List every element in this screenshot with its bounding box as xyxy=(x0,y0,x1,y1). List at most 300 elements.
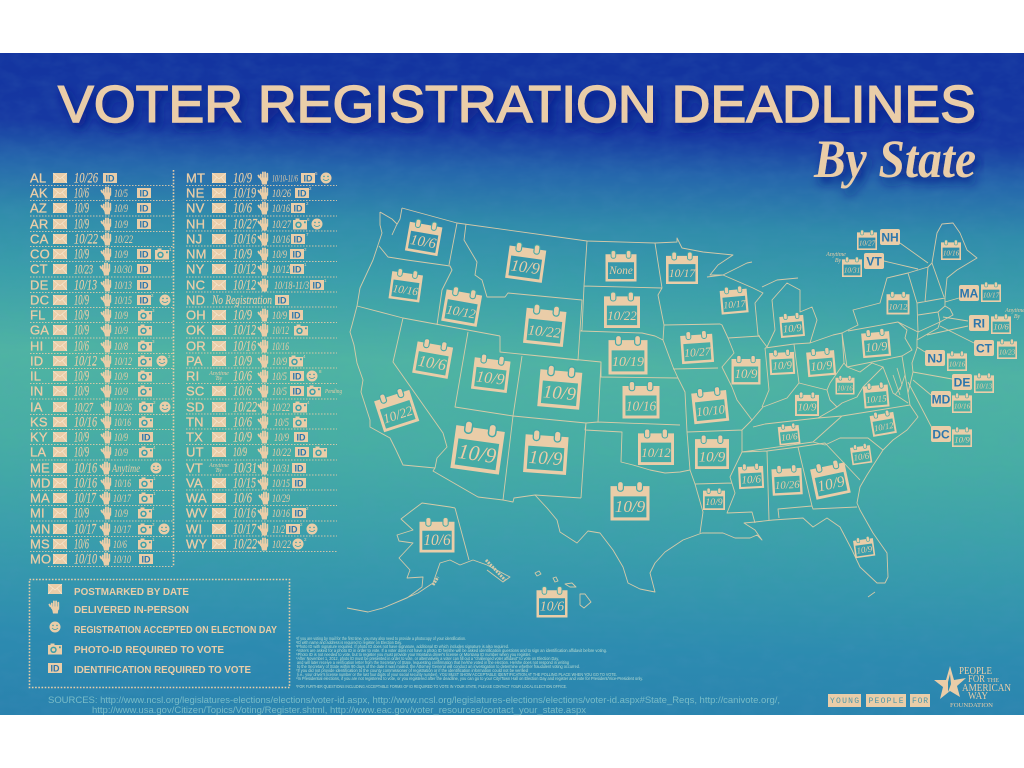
calendar: NC: 10/12 xyxy=(873,420,895,433)
row: WI: 11/2 xyxy=(272,522,285,536)
logo: Young People For xyxy=(828,694,930,707)
row: AZ: ID xyxy=(140,204,149,214)
row: SC xyxy=(186,384,342,400)
row: CA xyxy=(30,232,133,248)
row: WV: 10/16 xyxy=(233,506,256,522)
row: RI xyxy=(186,368,322,384)
legend: delivered xyxy=(49,601,189,616)
row: TN: 10/6 xyxy=(233,414,252,430)
row: AL: ID xyxy=(106,174,115,184)
row: LA: 10/9 xyxy=(114,445,128,459)
row: NV: ID xyxy=(294,204,303,214)
row: NE: NE xyxy=(186,186,205,200)
row: IL xyxy=(30,368,152,384)
row: OK: OK xyxy=(186,322,205,338)
row: AK: AK xyxy=(30,186,48,200)
calendar: ID: 10/12 xyxy=(445,302,477,322)
row: MA: 10/17 xyxy=(74,490,97,506)
callout: DE: 10/13 xyxy=(976,383,993,391)
row: WV xyxy=(186,506,309,522)
row: NC xyxy=(186,278,327,294)
calendar: SD: 10/22 xyxy=(607,308,637,323)
row: VT: ID xyxy=(294,464,304,474)
row: WA: 10/6 xyxy=(233,490,252,506)
row: AK: 10/6 xyxy=(74,186,89,202)
row: AL: AL xyxy=(30,170,46,186)
row: ND: ND xyxy=(186,292,205,308)
row: IA: 2 xyxy=(153,400,156,405)
row: ME xyxy=(30,460,162,476)
calendar: FL: 10/9 xyxy=(856,543,873,556)
row: NC: ID xyxy=(312,280,322,290)
row: MD: MD xyxy=(30,476,51,490)
row: RI: 10/5 xyxy=(272,369,287,383)
row: SC: Pending xyxy=(324,389,342,395)
row: ME: Anytime xyxy=(111,461,140,475)
calendar: NY: 10/12 xyxy=(889,302,907,311)
row: TN: TN xyxy=(186,414,204,430)
row: NV: 2 xyxy=(306,201,309,206)
row: ND xyxy=(186,292,289,308)
row: NM: 10/9 xyxy=(272,247,287,261)
row: OH: OH xyxy=(186,308,206,322)
row: MA: 10/17 xyxy=(113,491,132,505)
calendar: IN: 10/9 xyxy=(772,359,793,372)
calendar: OR: 10/16 xyxy=(392,283,419,298)
row: DE: ID xyxy=(140,280,149,290)
footnotes: to the Secretary of State within 90 days of the date it was mailed, the Attorney General will conduct an investigation to determine whether fraudulent voting occurred. xyxy=(297,664,580,669)
row: MD: 10/16 xyxy=(114,476,131,490)
calendar: WY xyxy=(523,303,567,347)
row: CO: 10/9 xyxy=(114,247,128,261)
calendar: OH xyxy=(806,347,836,377)
row: NM: 2 xyxy=(304,247,307,252)
calendar: LA: 10/9 xyxy=(705,497,723,508)
row: SD: 10/22 xyxy=(233,400,257,416)
row: ND: ID xyxy=(278,296,287,306)
callout: RI xyxy=(969,308,1024,334)
row: NV: NV xyxy=(186,200,205,216)
calendar: IA xyxy=(680,330,714,364)
logo: People For the American Way Foundation xyxy=(934,666,1011,709)
row: CO xyxy=(30,246,172,262)
calendar: CO xyxy=(537,364,583,410)
row: VA: ID xyxy=(294,478,304,488)
row: AK: 10/5 xyxy=(114,186,128,200)
row: AK: ID xyxy=(140,188,149,198)
sources: http://www.usa.gov/Citizen/Topics/Voting/Register.shtml, http://www.eac.gov/voter_resources/contact_your_state.aspx xyxy=(92,705,586,716)
row: KY: 10/9 xyxy=(74,430,89,446)
row: DC: 10/9 xyxy=(74,292,89,308)
calendar: HI: 10/6 xyxy=(540,599,564,614)
callout: NH: NH xyxy=(881,230,899,244)
row: MI: 10/9 xyxy=(114,506,128,520)
row: AZ: 10/9 xyxy=(74,200,89,216)
calendar: OK: 10/12 xyxy=(641,445,671,460)
row: OK: 10/12 xyxy=(233,322,256,338)
row: FL: 10/9 xyxy=(74,308,89,324)
row: NV: 10/6 xyxy=(233,200,252,216)
row: NY: 1 xyxy=(304,262,307,267)
footnotes: ⁸In Presidential elections, if you are not registered to vote, or you registered after the deadline, you can go to your City/Town Hall on Election Day and register and vote for President/Vice-President only. xyxy=(296,676,643,681)
row: MN xyxy=(30,522,170,538)
row: RI: 8 xyxy=(319,369,322,374)
calendar: FL xyxy=(853,536,875,558)
row: AR: 10/9 xyxy=(74,216,89,232)
row: WY: 10/22 xyxy=(233,536,257,552)
row: ME: 10/16 xyxy=(74,460,97,476)
calendar: ME xyxy=(941,240,961,260)
row: HI: 10/6 xyxy=(74,338,89,354)
row: CO: CO xyxy=(30,246,50,262)
callout: NH: 10/27 xyxy=(859,240,876,248)
callout: DE xyxy=(952,373,994,393)
footnotes: ⁶After November 1, 2012, photo ID must be presented in order to vote, or alternatively a voter can fill out a "challenged voter affidavit" to vote on Election Day, xyxy=(296,656,559,661)
row: CA: CA xyxy=(30,232,49,246)
row: SD: 4 xyxy=(307,400,310,405)
row: KS: 10/16 xyxy=(74,414,97,430)
row: AR xyxy=(30,216,151,232)
row: WA: 10/29 xyxy=(272,491,290,505)
callout: MA: 10/17 xyxy=(983,292,1000,300)
row: AK xyxy=(30,186,151,202)
row: MO xyxy=(30,552,153,568)
legend: election day xyxy=(50,622,277,636)
calendar: NE xyxy=(608,336,648,374)
calendar: AR xyxy=(695,435,729,469)
row: MS: 10/6 xyxy=(113,537,127,551)
row: MD: 10/16 xyxy=(74,476,97,492)
row: NE: 10/26 xyxy=(272,186,291,200)
footnotes: ³Photo ID with signature required. If photo ID does not have signature, additional ID which includes signature is also required. xyxy=(296,644,509,649)
row: UT: 10/22 xyxy=(272,445,291,459)
row: AR: 10/9 xyxy=(114,217,128,231)
row: IA: 10/26 xyxy=(114,400,132,414)
row: AZ xyxy=(30,200,151,216)
row: PA xyxy=(186,354,306,370)
calendar: WI: 10/17 xyxy=(723,298,747,311)
calendar: SC xyxy=(850,443,872,465)
calendar: GA: 10/9 xyxy=(816,473,847,495)
calendar: LA xyxy=(703,488,725,510)
row: KS xyxy=(30,414,153,430)
calendar: AR: 10/9 xyxy=(699,450,726,466)
callout: DC xyxy=(931,426,972,447)
row: MA xyxy=(30,490,156,506)
row: ND: No Registration xyxy=(211,292,272,307)
calendar: NY xyxy=(886,292,910,314)
row: WI xyxy=(186,522,318,538)
row: NV: 10/16 xyxy=(272,201,290,215)
row: MN: 10/17 xyxy=(113,522,132,536)
calendar: UT xyxy=(471,353,511,393)
row: RI: RI xyxy=(186,368,199,384)
row: OR xyxy=(186,338,289,354)
row: WI: 2 xyxy=(300,522,303,527)
callout: MA xyxy=(959,282,1001,302)
row: OH: 10/9 xyxy=(272,308,287,322)
row: PA: PA xyxy=(186,354,203,368)
calendar: IN xyxy=(769,349,795,375)
row: MN: 10/17 xyxy=(74,522,97,538)
calendar: GA xyxy=(809,458,851,500)
row: RI: 10/6 xyxy=(233,368,252,384)
calendar: NV xyxy=(412,337,454,379)
calendar: NM: 10/9 xyxy=(528,447,564,470)
calendar: AZ xyxy=(450,419,506,475)
row: MT: 10/9 xyxy=(233,170,252,186)
logo: Young People For: YOUNG xyxy=(830,697,859,706)
logo: Young People For: PEOPLE xyxy=(868,697,904,706)
row: SD: SD xyxy=(186,400,204,414)
row: NM: NM xyxy=(186,246,207,262)
row: ID: ID xyxy=(30,354,43,368)
row: IN: 10/9 xyxy=(114,384,128,398)
callout: NJ xyxy=(925,350,967,371)
calendar: AL: 10/26 xyxy=(775,479,800,492)
calendar: IL: 10/9 xyxy=(735,367,758,381)
row: MT: ID xyxy=(304,174,313,184)
row: CT: CT xyxy=(30,262,48,276)
row: CA: 10/22 xyxy=(114,232,133,246)
row: GA: 10/9 xyxy=(74,322,89,338)
calendar: TX xyxy=(610,482,650,520)
calendar: VA xyxy=(862,381,890,409)
footnotes: *FOR FURTHER QUESTIONS INCLUDING ACCEPTABLE FORMS OF ID REQUIRED TO VOTE IN YOUR STATE, PLEASE CONTACT YOUR LOCAL ELECTION OFFICE. xyxy=(296,684,567,689)
row: GA xyxy=(30,322,152,338)
row: FL xyxy=(30,308,155,324)
row: ID xyxy=(30,354,171,370)
calendar: NC xyxy=(869,409,897,437)
calendar: TN xyxy=(777,422,801,446)
row: UT xyxy=(186,444,327,460)
row: NM: 10/9 xyxy=(233,246,252,262)
row: NE: 2 xyxy=(309,186,312,191)
row: LA: 4 xyxy=(153,445,156,450)
row: UT: UT xyxy=(186,444,204,460)
row: IL: 10/9 xyxy=(74,368,89,384)
row: OH: 10/9 xyxy=(233,308,252,324)
row: DC xyxy=(30,292,170,308)
row: WV: WV xyxy=(186,506,207,520)
calendar: WA xyxy=(405,218,443,256)
row: VA: VA xyxy=(186,476,203,490)
callout: RI: By xyxy=(1014,314,1021,320)
logo: People For the American Way Foundation: WAY xyxy=(968,691,988,702)
row: UT: ID xyxy=(298,448,307,458)
row: DC: 2 xyxy=(151,293,154,298)
row: LA: LA xyxy=(30,444,46,460)
calendar: MI xyxy=(779,312,805,338)
row: TX: TX xyxy=(186,430,203,444)
calendar: ME: 10/16 xyxy=(943,250,960,258)
row: CO: ID xyxy=(140,250,149,260)
callout: CT: CT xyxy=(976,342,993,356)
row: OR: 10/16 xyxy=(233,338,256,354)
logo: People For the American Way Foundation: FOUNDATION xyxy=(950,703,994,709)
row: WA: WA xyxy=(186,490,207,506)
row: NJ: 7 xyxy=(306,232,309,237)
row: MO: ID xyxy=(142,554,151,564)
logo: People For the American Way Foundation: FOR xyxy=(968,674,985,685)
row: TN: 10/5 xyxy=(274,415,289,429)
row: NJ xyxy=(186,232,309,248)
row: WI: WI xyxy=(186,522,202,536)
logo: People For the American Way Foundation: THE xyxy=(987,678,999,684)
row: VT: By xyxy=(216,468,223,474)
calendar: MN: 10/17 xyxy=(669,268,696,280)
row: SC: 10/6 xyxy=(233,384,252,400)
callout: RI: RI xyxy=(973,316,985,330)
calendar: KS: 10/16 xyxy=(626,398,657,413)
row: CO: 1 xyxy=(169,247,172,252)
row: HI: 10/8 xyxy=(114,339,128,353)
row: CO: 10/9 xyxy=(74,246,89,262)
row: WY: 2 xyxy=(304,537,307,542)
row: VT: Anytime xyxy=(208,463,229,469)
calendar: UT: 10/9 xyxy=(475,368,505,389)
row: KY xyxy=(30,430,153,446)
row: SC: 10/5 xyxy=(272,384,287,398)
row: NY: 10/12 xyxy=(272,262,290,276)
row: MT: 5 xyxy=(315,171,318,176)
row: DE: 10/13 xyxy=(114,278,132,292)
subtitle: By State: By State xyxy=(813,129,976,189)
calendar: AK: 10/6 xyxy=(423,532,451,549)
row: WA xyxy=(186,490,290,506)
row: NC: 1 xyxy=(324,278,327,283)
row: OR: OR xyxy=(186,338,206,354)
row: NC: 10/18-11/3 xyxy=(274,278,309,292)
calendar: MT xyxy=(505,241,547,283)
row: KS: KS xyxy=(30,414,48,430)
calendar: OK xyxy=(638,429,674,465)
row: DE: 10/13 xyxy=(74,278,97,294)
row: IL: 10/9 xyxy=(114,369,128,383)
callout: CT xyxy=(974,339,1017,359)
sources: SOURCES: http://www.ncsl.org/legislatures-elections/elections/voter-id.aspx, http://www.ncsl.org/legislatures-elections/elections/voter-id.aspx#State_Reqs, http://canivote.org/, xyxy=(48,695,780,706)
calendar: VA: 10/15 xyxy=(866,393,887,405)
row: OK: 10/12 xyxy=(272,323,289,337)
panel: state table column two xyxy=(176,170,342,552)
row: NV xyxy=(186,200,309,216)
calendar: WV xyxy=(836,376,854,394)
row: AL xyxy=(30,170,117,186)
row: MN: MN xyxy=(30,522,51,536)
callout: VT: Anytime xyxy=(825,252,846,258)
calendar: PA xyxy=(861,328,891,358)
footnotes: (i.e., your driver's license number or the last four digits of your social security number), YOU MUST SHOW ACCEPTABLE IDENTIFICATION AT THE POLLING PLACE WHEN YOU GO TO VOTE. xyxy=(297,672,617,677)
footnotes xyxy=(296,636,643,689)
connector lines for small states xyxy=(884,243,974,428)
calendar: NV: 10/6 xyxy=(417,353,447,374)
calendar: ND xyxy=(606,250,636,282)
calendar: AK xyxy=(420,518,454,552)
row: AZ: AZ xyxy=(30,200,47,216)
callout: DC: DC xyxy=(932,428,950,442)
row: MT xyxy=(186,170,332,186)
row: VT: 10/31 xyxy=(272,461,290,475)
row: DE: DE xyxy=(30,278,49,292)
row: NH: NH xyxy=(186,216,205,232)
calendar: WA: 10/6 xyxy=(409,232,438,252)
row: IN xyxy=(30,384,152,400)
row: NY: ID xyxy=(292,264,302,274)
calendar: TX: 10/9 xyxy=(615,497,646,516)
row: NH: 10/27 xyxy=(233,216,258,232)
row: VT: 10/31 xyxy=(233,460,257,476)
footnotes: ¹If you are voting by mail for the first time, you may also need to provide a photocopy of your identification. xyxy=(296,636,466,641)
row: NY: 10/12 xyxy=(233,262,256,278)
row: KS: 10/16 xyxy=(114,415,131,429)
row: SD: 10/22 xyxy=(272,400,290,414)
footnotes: and will later receive a verification letter from the Secretary of State, requesting confirmation that he/she voted in the election. He/she does not respond in writing xyxy=(297,660,570,665)
map of US state outlines xyxy=(350,208,977,597)
calendar: CA: 10/22 xyxy=(381,403,415,426)
row: NC: 10/12 xyxy=(233,278,256,294)
legend: postmarked xyxy=(48,584,189,598)
row: MI: MI xyxy=(30,506,45,520)
footnotes: ⁵Photo ID is not needed to vote, but to register you must provide your Montana driver's license or Montana ID number when you register. xyxy=(296,652,531,657)
callout: DC: 10/9 xyxy=(954,435,970,445)
row: SD xyxy=(186,400,310,416)
calendar: MO xyxy=(691,386,729,424)
callout: RI: 10/6 xyxy=(993,322,1009,332)
row: IL: IL xyxy=(30,368,41,384)
row: MO: MO xyxy=(30,552,51,566)
row: AZ: 10/9 xyxy=(114,201,128,215)
calendar: KY xyxy=(795,392,819,416)
row: AR: ID xyxy=(140,220,149,230)
logo: People For the American Way Foundation: PEOPLE xyxy=(959,666,992,677)
row: RI: ID xyxy=(292,372,302,382)
calendar: MO: 10/10 xyxy=(696,402,726,419)
Hawaii outline xyxy=(535,571,591,608)
calendar: MT: 10/9 xyxy=(510,255,541,278)
row: MA: MA xyxy=(30,490,50,506)
row: HI: 3 xyxy=(152,339,155,344)
row: CT: ID xyxy=(140,264,149,274)
callout: DE: DE xyxy=(954,376,970,390)
calendar: MS: 10/6 xyxy=(741,473,762,486)
callout: MD xyxy=(931,391,972,413)
row: OH xyxy=(186,308,303,324)
panel: state table column one xyxy=(30,170,174,568)
row: VA xyxy=(186,476,306,492)
logo: Young People For: FOR xyxy=(912,697,928,706)
calendar: MI: 10/9 xyxy=(783,323,803,336)
calendar: WV: 10/16 xyxy=(837,385,853,392)
legend: photo id: PHOTO-ID REQUIRED TO VOTE xyxy=(74,644,224,656)
callout: NH xyxy=(857,229,900,250)
row: PA: 10/9 xyxy=(272,354,287,368)
row: DC: 10/15 xyxy=(114,293,132,307)
row: HI xyxy=(30,338,155,354)
row: KY: 10/9 xyxy=(114,430,128,444)
row: NJ: ID xyxy=(294,234,303,244)
row: FL: 10/9 xyxy=(114,308,128,322)
calendar: IA: 10/27 xyxy=(684,346,712,360)
title: VOTER REGISTRATION DEADLINES xyxy=(58,76,976,134)
row: NE: ID xyxy=(298,188,307,198)
row: NM: ID xyxy=(292,250,302,260)
row: IA: 10/27 xyxy=(74,400,93,414)
row: ME: ME xyxy=(30,460,50,476)
row: AL: 10/26 xyxy=(74,170,98,186)
row: MD xyxy=(30,476,156,492)
row: MO: 10/10 xyxy=(74,552,97,568)
row: NJ: NJ xyxy=(186,232,202,246)
